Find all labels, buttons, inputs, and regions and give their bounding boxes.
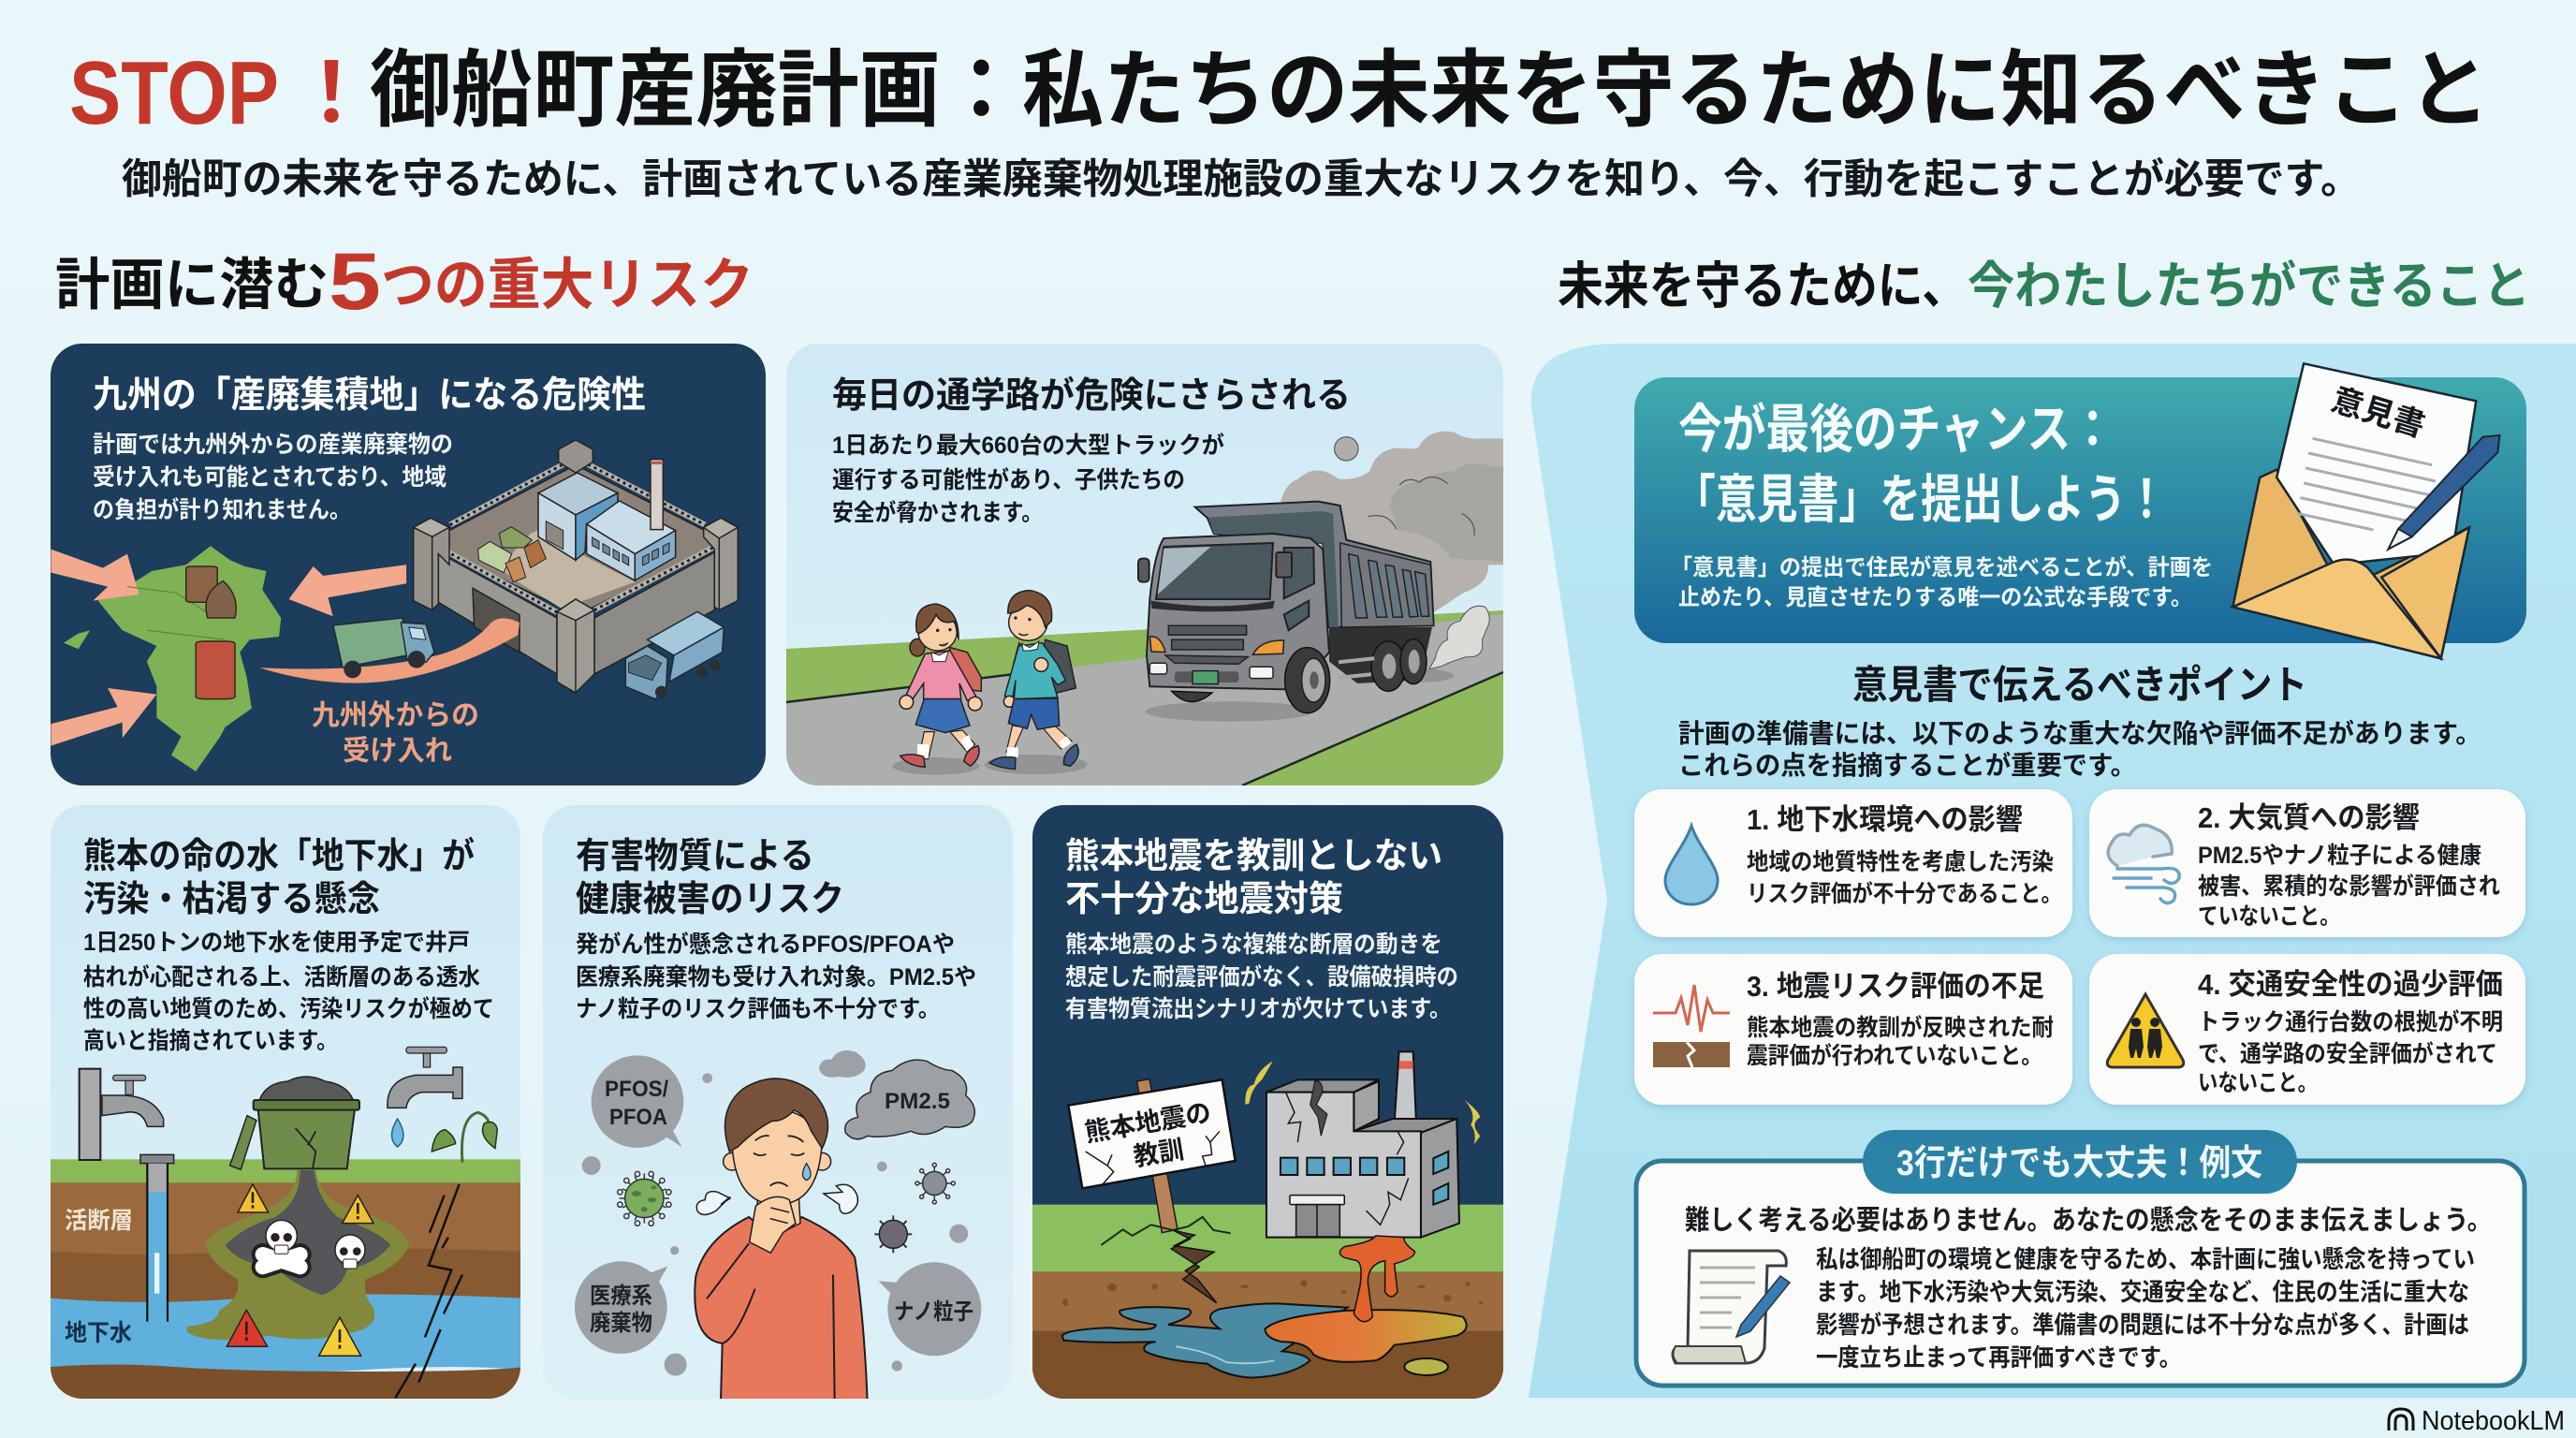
body text: 高いと指摘されています。 [83,1028,338,1054]
card title: 1. 地下水環境への影響 [1747,803,2023,836]
icon: scroll and pen [1673,1251,1790,1363]
heading [576,837,844,919]
label: from outside Kyushu [312,700,479,767]
blue puddle [1062,1303,1348,1378]
heading: 健康被害のリスク [576,880,844,919]
text: intro to points: 計画の準備書には、以下のような重大な欠陥や評価不足があります。 [1678,718,2481,748]
fault line [425,1184,460,1337]
card text: 被害、累積的な影響が評価され [2198,873,2500,900]
title: 御船町産廃計画：私たちの未来を守るために知るべきこと [370,44,2490,138]
body text: 枯れが心配される上、活断層のある透水 [83,963,480,990]
banner heading: 「意見書」を提出しよう！ [1675,470,2167,529]
body text [832,432,1224,526]
banner heading [1675,400,2167,529]
heading [83,837,475,919]
sign text: 教訓 [1132,1135,1186,1171]
heading: 不十分な地震対策 [1065,880,1343,919]
text: intro to points: これらの点を指摘することが重要です。 [1678,750,2136,780]
body text: 熊本地震のような複雑な断層の動きを [1065,932,1442,958]
icon: water drop [1665,826,1718,904]
heading: five risks: つの重大リスク [381,254,754,316]
panel: Kyushu waste hub [51,344,766,785]
banner text: 「意見書」の提出で住民が意見を述べることが、計画を [1671,554,2213,580]
wilted plant [461,1112,489,1163]
card title: 2. 大気質への影響 [2198,801,2420,834]
heading: what we can do: 未来を守るために、 [1558,258,1968,315]
bubble labels: PFOA [609,1105,667,1130]
text: intro to points [1678,718,2481,780]
banner heading: 今が最後のチャンス： [1678,400,2115,459]
icon: opinion letter in envelope with pen: 意見書 [2327,382,2429,444]
heading: 九州の「産廃集積地」になる危険性 [93,375,646,416]
right faucet [423,1053,431,1067]
card text: ていないこと。 [2198,903,2340,930]
heading: 熊本地震を教訓としない [1065,837,1442,876]
heading: 汚染・枯渇する懸念 [83,880,380,919]
card text [1747,849,2062,907]
boy [1039,639,1076,694]
body text [1065,932,1458,1022]
body text: 受け入れも可能とされており、地域 [93,464,446,491]
illustration: fortress waste facility and trucks [259,440,738,699]
bubble labels: ナノ粒子 [894,1299,973,1325]
trash can [259,1077,353,1100]
icon: seismograph and cracked ground [1653,985,1730,1067]
card text [1747,1014,2054,1069]
illustration: road and grass [786,610,1503,785]
heading: what we can do: 今わたしたちができること [1968,258,2530,315]
bubble labels: 廃棄物 [590,1311,652,1336]
dark virus [874,1215,912,1253]
body text: 性の高い地質のため、汚染リスクが極めて [83,995,494,1022]
card text: いないこと。 [2198,1070,2318,1096]
illustration: damaged factory, sign and leaking chemicals [1032,1051,1507,1402]
green virus [620,1173,669,1224]
skulls [263,1255,300,1267]
title: STOP [69,43,279,143]
example text [1816,1245,2475,1372]
card text: 熊本地震の教訓が反映された耐 [1747,1014,2054,1041]
panel: actions [1529,344,2576,1398]
example text: 私は御船町の環境と健康を守るため、本計画に強い懸念を持ってい [1816,1245,2475,1273]
label: from outside Kyushu: 受け入れ [343,736,452,767]
illustration: dump truck and exhaust smoke [1138,432,1510,722]
orange puddle [1265,1310,1467,1362]
banner text: 止めたり、見直させたりする唯一の公式な手段です。 [1678,585,2192,610]
pill heading: 3行だけでも大丈夫！例文 [1896,1144,2262,1183]
body text [93,432,453,523]
body text [576,931,976,1022]
label: from outside Kyushu: 九州外からの [312,700,479,731]
panel: health risk [543,805,1013,1401]
card 2: air quality [2089,789,2525,937]
body text: 1日250トンの地下水を使用予定で井戸 [83,930,470,956]
banner text [1671,554,2213,610]
example box [1636,1130,2525,1386]
card title: 4. 交通安全性の過少評価 [2198,968,2503,1001]
heading: five risks [55,237,754,327]
factory [1395,1051,1416,1123]
label: groundwater: 地下水 [65,1320,132,1346]
heading [1065,837,1442,919]
illustration: coughing person surrounded by pollutants [575,1050,981,1401]
card title: 3. 地震リスク評価の不足 [1747,970,2044,1003]
girl [948,648,981,691]
body text: 運行する可能性があり、子供たちの [832,466,1185,493]
heading: five risks: 5 [329,237,381,327]
card text: リスク評価が不十分であること。 [1747,880,2062,907]
icon: opinion letter in envelope with pen [2232,363,2500,658]
example text: 影響が予想されます。準備書の問題には不十分な点が多く、計画は [1816,1311,2469,1339]
card text [2198,1008,2503,1096]
card text [2198,843,2500,930]
title: ！ [290,27,373,146]
card 1: groundwater [1634,789,2072,937]
card text: 地域の地質特性を考慮した汚染 [1747,849,2054,875]
body text: 医療系廃棄物も受け入れ対象。PM2.5や [576,964,976,990]
heading: 毎日の通学路が危険にさらされる [832,376,1351,416]
banner: submit your opinion [1634,363,2526,658]
body text: 有害物質流出シナリオが欠けています。 [1065,995,1451,1022]
icon: school crossing sign [2107,994,2184,1067]
sign [1137,1079,1178,1233]
body text [83,930,494,1054]
grey virus [915,1164,955,1203]
body text: 安全が脅かされます。 [832,499,1043,526]
body text: 想定した耐震評価がなく、設備破損時の [1065,963,1458,990]
card text: 震評価が行われていないこと。 [1747,1042,2042,1069]
bubble labels: PM2.5 [885,1089,950,1114]
panel: school route [786,344,1510,785]
body text: 発がん性が懸念されるPFOS/PFOAや [576,931,955,958]
body text: の負担が計り知れません。 [93,496,351,523]
card 3: earthquake risk [1634,954,2072,1105]
bubble labels: 医療系 [590,1284,652,1309]
heading: what we can do [1558,258,2530,315]
card text: PM2.5やナノ粒子による健康 [2198,843,2481,869]
body text: 計画では九州外からの産業廃棄物の [93,432,453,458]
icon: cloud and wind [2108,825,2179,903]
subtitle: 御船町の未来を守るために、計画されている産業廃棄物処理施設の重大なリスクを知り、今、行動を起こすことが必要です。 [122,156,2361,202]
pill heading [1863,1130,2297,1194]
illustration: two children walking [892,591,1088,775]
well pipe [140,1154,174,1164]
sign text [1083,1098,1219,1179]
example text: 一度立ち止まって再評価すべきです。 [1816,1343,2181,1372]
title [69,27,2490,146]
card text: で、通学路の安全評価がされて [2198,1040,2497,1067]
left standpipe and faucet [80,1069,100,1160]
illustration: Kyushu map with waste drums and arrows [51,546,406,771]
heading: 熊本の命の水「地下水」が [83,837,475,876]
example intro: 難しく考える必要はありません。あなたの懸念をそのまま伝えましょう。 [1685,1205,2492,1236]
bubble labels: PFOS/ [605,1077,668,1102]
card text: トラック通行台数の根拠が不明 [2198,1008,2503,1035]
bubble labels [590,1077,973,1336]
heading: 有害物質による [576,837,814,876]
body text: ナノ粒子のリスク評価も不十分です。 [576,996,940,1022]
ground crack [1101,1217,1231,1245]
sign text: 熊本地震の [1083,1098,1213,1148]
illustration: contaminated groundwater cross-section [51,1047,525,1404]
heading: five risks: 計画に潜む [55,254,329,316]
example text: ます。地下水汚染や大気汚染、交通安全など、住民の生活に重大な [1816,1278,2469,1306]
person [695,1217,868,1401]
panel: earthquake [1032,805,1507,1402]
card 4: traffic safety [2089,954,2525,1105]
label: active fault: 活断層 [65,1208,133,1234]
NotebookLM logo: NotebookLM [2422,1406,2565,1436]
panel: groundwater [51,805,525,1404]
body text: 1日あたり最大660台の大型トラックが [832,432,1224,459]
heading: points to convey: 意見書で伝えるべきポイント [1852,663,2307,707]
